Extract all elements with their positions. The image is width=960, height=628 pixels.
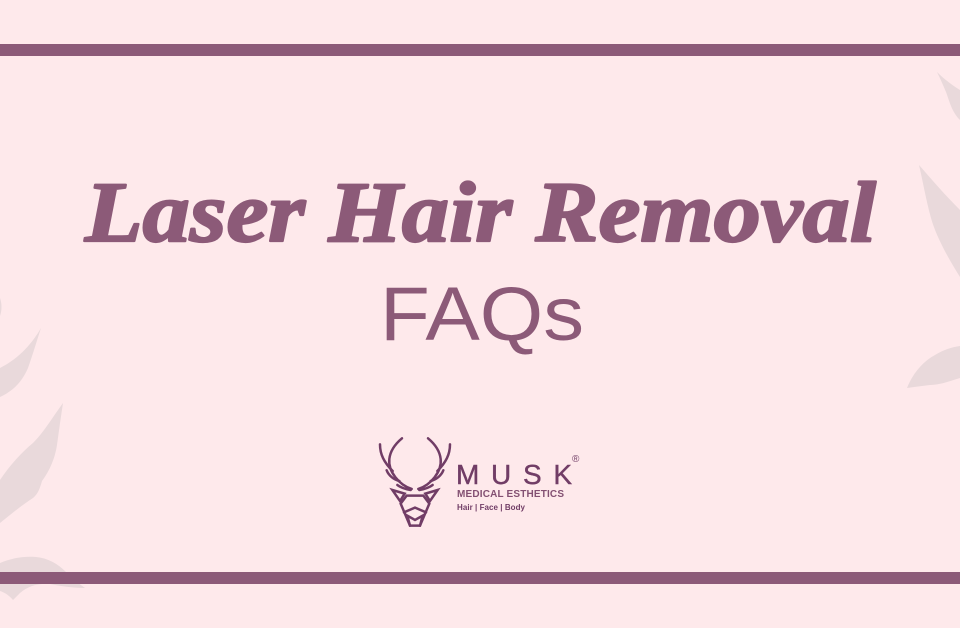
icon: deer head [380, 438, 450, 526]
registered mark: ® [572, 454, 580, 465]
bottom bar [0, 572, 960, 584]
logo [380, 438, 580, 526]
decorative leaves: right [907, 72, 960, 388]
title: Laser Hair Removal [84, 164, 876, 260]
decorative leaves: left [0, 298, 85, 600]
logo wordmark: MUSK [456, 459, 572, 490]
logo tagline: Hair | Face | Body [457, 503, 526, 512]
subtitle: FAQs [380, 272, 584, 357]
logo name line: MEDICAL ESTHETICS [457, 489, 564, 500]
top bar [0, 44, 960, 56]
